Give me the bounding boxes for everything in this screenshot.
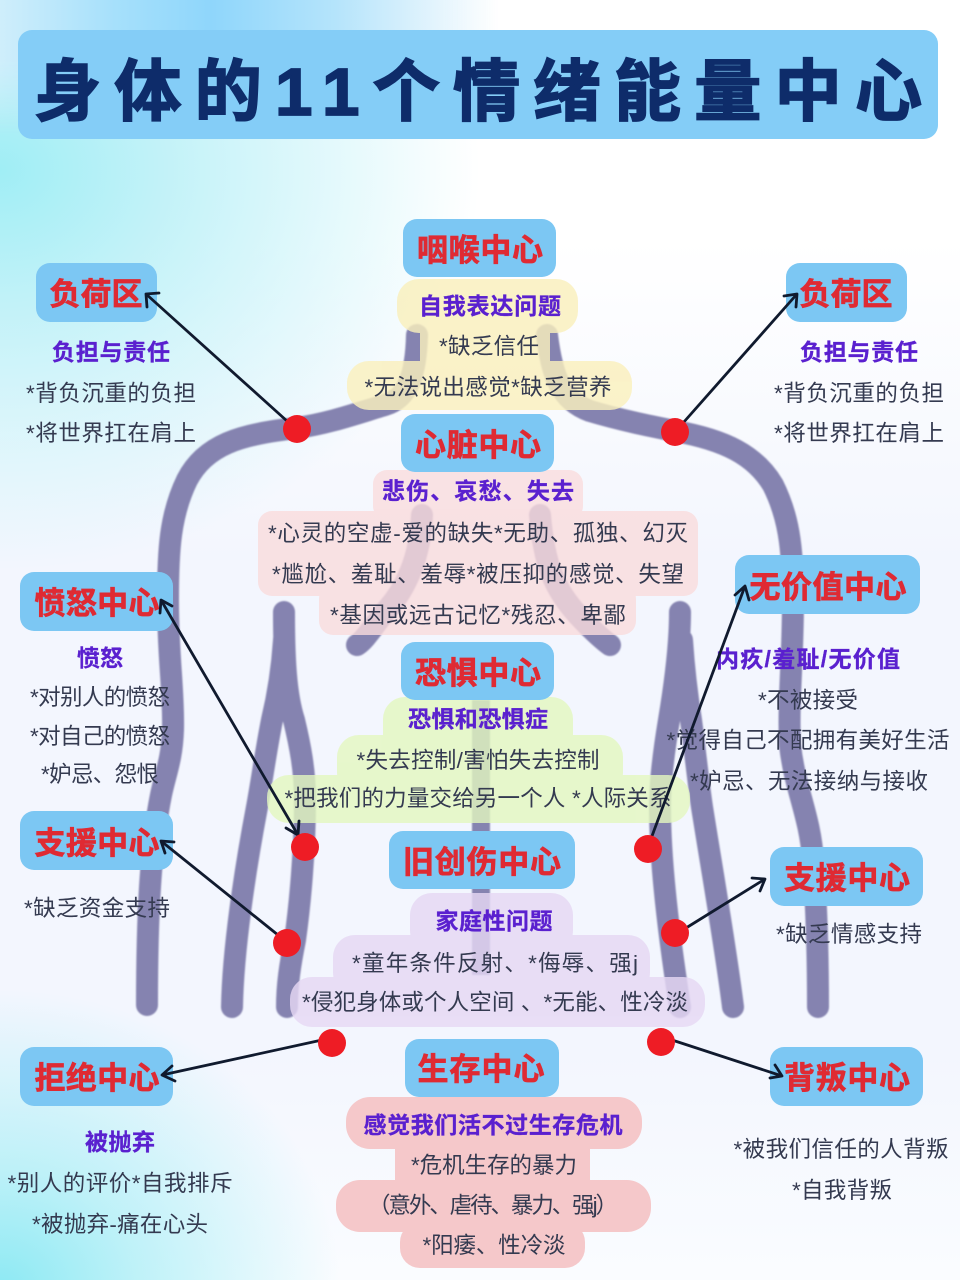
center column: heart: *尴尬、羞耻、羞辱*被压抑的感觉、失望	[272, 562, 684, 587]
center column: throat: 咽喉中心	[417, 233, 543, 268]
right: burden zone: *将世界扛在肩上	[774, 421, 944, 446]
left: support center: 支援中心	[34, 826, 160, 861]
title: 身体的11个情绪能量中心	[34, 55, 922, 130]
left: burden zone: *背负沉重的负担	[26, 381, 196, 406]
left: burden zone: *将世界扛在肩上	[26, 421, 196, 446]
center column: old trauma: 旧创伤中心	[403, 845, 561, 880]
right: support center	[770, 847, 923, 947]
center column: old trauma: *侵犯身体或个人空间 、*无能、性冷淡	[302, 990, 688, 1015]
left: support center: *缺乏资金支持	[24, 896, 170, 921]
left: rejection center: 被抛弃	[85, 1129, 155, 1155]
right: betrayal center: *被我们信任的人背叛	[734, 1137, 948, 1162]
left: rejection center: 拒绝中心	[34, 1061, 160, 1096]
left: anger center: 愤怒	[77, 645, 123, 671]
left: anger center: 愤怒中心	[34, 586, 160, 621]
right: burden zone	[774, 263, 944, 446]
left: rejection center: *别人的评价*自我排斥	[8, 1171, 232, 1196]
panel: fear bubble	[267, 697, 690, 823]
left: anger center	[20, 572, 173, 787]
center column: old trauma: *童年条件反射、*侮辱、强j	[352, 951, 638, 976]
center column: fear: *把我们的力量交给另一个人 *人际关系	[284, 786, 672, 811]
center column: heart: 悲伤、哀愁、失去	[382, 478, 574, 504]
center column: fear: *失去控制/害怕失去控制	[356, 748, 600, 773]
right: support center: *缺乏情感支持	[776, 922, 922, 947]
arrow: to anger center	[160, 600, 299, 835]
left: support center	[20, 811, 173, 921]
center column: fear: 恐惧中心	[415, 656, 541, 691]
right: worthlessness center: 内疚/羞耻/无价值	[716, 646, 900, 672]
center column: fear	[284, 642, 672, 811]
panel: old trauma bubble	[290, 893, 705, 1027]
center column: survival: 生存中心	[418, 1052, 544, 1087]
center column: throat: 自我表达问题	[419, 293, 561, 319]
center column: fear: 恐惧和恐惧症	[408, 706, 548, 732]
center column: heart	[268, 414, 688, 628]
arrow: to right support center	[686, 878, 765, 928]
left: anger center: *对自己的愤怒	[30, 724, 170, 749]
center column: throat: *缺乏信任	[439, 334, 539, 359]
left: anger center: *妒忌、怨恨	[41, 762, 159, 787]
center column: survival: *危机生存的暴力	[411, 1153, 577, 1178]
body outline figure	[147, 335, 818, 1007]
center column: survival	[364, 1039, 622, 1258]
center column: survival: （意外、虐待、暴力、强j）	[368, 1193, 618, 1218]
panel: heart bubble	[258, 470, 698, 635]
right: worthlessness center: *觉得自己不配拥有美好生活	[666, 728, 950, 753]
center column: throat: *无法说出感觉*缺乏营养	[364, 375, 612, 400]
right: support center: 支援中心	[784, 861, 910, 896]
center column: survival: *阳痿、性冷淡	[422, 1233, 566, 1258]
right: worthlessness center	[666, 555, 950, 794]
right: burden zone: 负荷区	[800, 277, 892, 312]
center column: old trauma: 家庭性问题	[436, 908, 552, 934]
right: betrayal center	[734, 1047, 948, 1203]
panel: throat bubble	[347, 279, 632, 410]
right: worthlessness center: 无价值中心	[750, 570, 906, 605]
center column: heart: *心灵的空虚-爱的缺失*无助、孤独、幻灭	[268, 521, 688, 546]
panel: title banner	[18, 30, 938, 139]
right: worthlessness center: *不被接受	[758, 688, 858, 713]
center column: old trauma	[302, 831, 688, 1015]
left: burden zone: 负荷区	[50, 277, 142, 312]
energy points: red dots	[273, 415, 689, 1057]
panel: survival bubble	[336, 1097, 651, 1268]
arrow: to right burden zone	[683, 294, 797, 423]
left: burden zone: 负担与责任	[52, 339, 170, 365]
arrow: to left support center	[161, 841, 278, 935]
center column: throat	[364, 219, 612, 400]
left: rejection center: *被抛弃-痛在心头	[32, 1212, 208, 1237]
left: burden zone	[26, 263, 196, 446]
center column: heart: 心脏中心	[415, 428, 541, 463]
right: betrayal center: *自我背叛	[792, 1178, 892, 1203]
arrow: to betrayal center	[672, 1040, 782, 1078]
arrow: to rejection center	[162, 1040, 322, 1081]
left: rejection center	[8, 1047, 232, 1237]
arrow: to left burden zone	[146, 293, 287, 421]
right: burden zone: 负担与责任	[800, 339, 918, 365]
center column: survival: 感觉我们活不过生存危机	[364, 1112, 622, 1138]
arrow: to worthlessness center	[652, 586, 749, 836]
left: anger center: *对别人的愤怒	[30, 685, 170, 710]
right: burden zone: *背负沉重的负担	[774, 381, 944, 406]
right: worthlessness center: *妒忌、无法接纳与接收	[690, 769, 928, 794]
center column: heart: *基因或远古记忆*残忍、卑鄙	[330, 603, 626, 628]
right: betrayal center: 背叛中心	[784, 1061, 910, 1096]
